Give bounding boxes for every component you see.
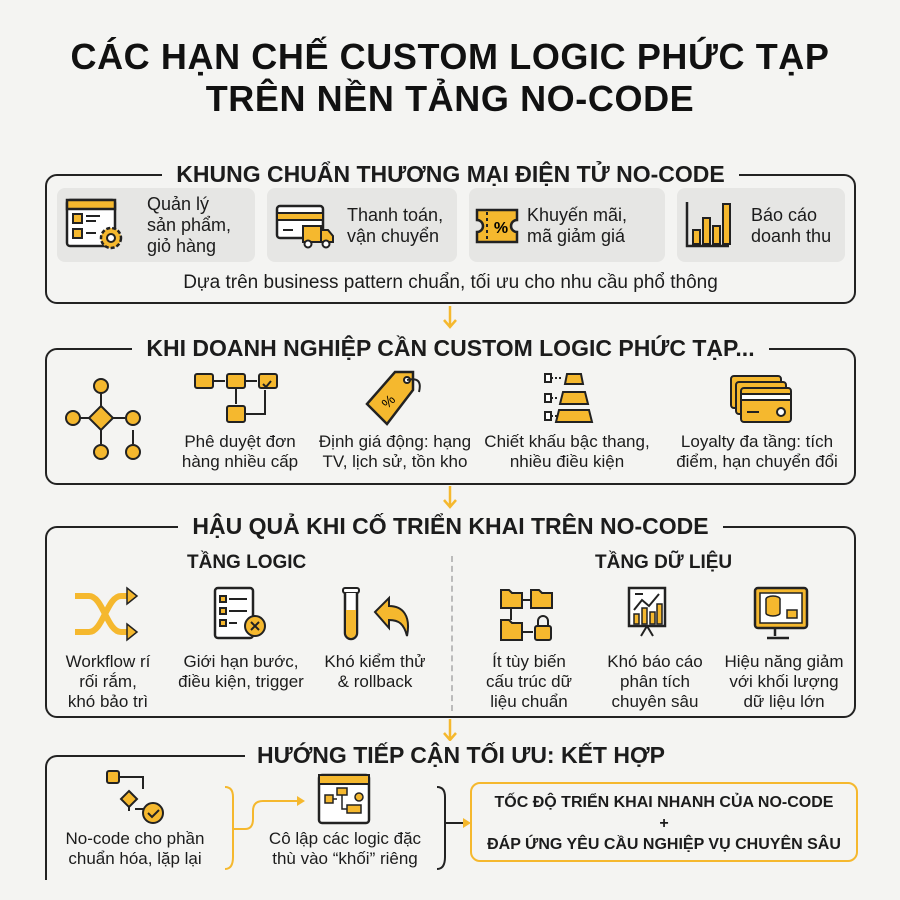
card: khuyến mãi (469, 188, 665, 262)
label: ít tùy biến: cấu trúc dữ (486, 672, 572, 691)
label: định giá: Định giá động: hạng (319, 432, 471, 451)
label: workflow (66, 652, 150, 711)
label: chiết khấu: nhiều điều kiện (510, 452, 624, 471)
label: no-code: chuẩn hóa, lặp lại (68, 849, 202, 868)
label: ít tùy biến (486, 652, 572, 711)
card: quản lý sản phẩm (57, 188, 255, 262)
footer text: Dựa trên business pattern chuẩn, tối ưu cho nhu cầu phổ thông (183, 272, 718, 293)
item: loyalty (676, 375, 838, 471)
label: giới hạn: Giới hạn bước, (184, 652, 298, 671)
text: quản lý: giỏ hàng (147, 236, 216, 256)
heading: khung chuẩn: KHUNG CHUẨN THƯƠNG MẠI ĐIỆN TỬ NO-CODE (176, 161, 725, 187)
result box: ĐÁP ỨNG YÊU CẦU NGHIỆP VỤ CHUYÊN SÂU (487, 836, 841, 853)
label: workflow: rối rắm, (79, 672, 137, 691)
label: loyalty: điểm, hạn chuyển đổi (676, 452, 838, 471)
label: hiệu năng: dữ liệu lớn (743, 692, 825, 711)
result box (470, 782, 858, 862)
label: hiệu năng: với khối lượng (729, 672, 839, 691)
item: định giá (319, 370, 471, 471)
title (70, 36, 830, 119)
icon: window blocks (317, 773, 377, 829)
icon: presentation chart (625, 586, 685, 644)
text: khuyến mãi (527, 205, 627, 246)
icon: stacked cards (730, 375, 792, 423)
panel: hướng tiếp cận (45, 755, 856, 880)
panel: custom logic (45, 348, 856, 485)
title: TRÊN NỀN TẢNG NO-CODE (206, 78, 694, 119)
item: kiểm thử (324, 587, 426, 691)
icon: monitor database (753, 586, 813, 644)
arrow 3 (441, 719, 459, 743)
icon: coupon (476, 208, 518, 244)
label: ít tùy biến: Ít tùy biến (492, 652, 566, 671)
result box: + (659, 815, 669, 832)
label: cô lập: Cô lập các logic đặc (269, 829, 421, 848)
label: no-code: No-code cho phần (66, 829, 204, 848)
label: cô lập (255, 829, 435, 869)
icon: price tag: % (378, 391, 398, 411)
icon: folders lock (500, 589, 553, 641)
icon: approval steps (194, 373, 278, 423)
label: chiết khấu: Chiết khấu bậc thang, (484, 432, 650, 451)
label: cô lập: thù vào “khối” riêng (272, 849, 418, 868)
icon: price tag (365, 370, 421, 426)
title: CÁC HẠN CHẾ CUSTOM LOGIC PHỨC TẠP (70, 36, 830, 77)
item: phê duyệt (182, 373, 298, 471)
label: phê duyệt (182, 432, 298, 471)
item: workflow (66, 586, 150, 711)
item: chiết khấu (484, 373, 650, 471)
icon: flow diagram (65, 378, 141, 460)
text: báo cáo: doanh thu (751, 226, 831, 246)
subheading: tầng logic: TẦNG LOGIC (187, 552, 306, 573)
text: khuyến mãi: mã giảm giá (527, 226, 625, 246)
icon: flow check (105, 769, 175, 829)
panel: khung chuẩn (45, 174, 856, 304)
label: hiệu năng (717, 652, 851, 712)
label: giới hạn (178, 652, 304, 691)
label: khó báo cáo (595, 652, 715, 712)
icon: test tube rollback (342, 587, 410, 640)
text: báo cáo: Báo cáo (751, 205, 817, 225)
text: quản lý: Quản lý (147, 194, 209, 214)
item: cô lập (255, 767, 435, 877)
label: hiệu năng: Hiệu năng giảm (724, 652, 844, 671)
card: báo cáo (677, 188, 845, 262)
label: loyalty (676, 432, 838, 471)
label: workflow: khó bảo trì (68, 692, 148, 711)
icon: bar chart (686, 202, 731, 248)
label: no-code (55, 829, 215, 869)
icon: product management (66, 198, 122, 250)
label: loyalty: Loyalty đa tầng: tích (681, 432, 833, 451)
item: giới hạn (178, 586, 304, 691)
arrow 1 (443, 306, 457, 329)
label: phê duyệt: Phê duyệt đơn (184, 432, 296, 451)
label: khó báo cáo: chuyên sâu (612, 692, 698, 711)
label: giới hạn: điều kiện, trigger (178, 672, 304, 691)
item: khó báo cáo (607, 586, 703, 711)
label: định giá (319, 432, 471, 471)
item: no-code (55, 767, 215, 877)
result box: TỐC ĐỘ TRIỂN KHAI NHANH CỦA NO-CODE (495, 794, 833, 811)
arrow 2 (443, 486, 457, 509)
label: ít tùy biến: liệu chuẩn (490, 692, 568, 711)
icon: checklist x (214, 586, 266, 640)
label: kiểm thử: & rollback (338, 672, 412, 691)
card: thanh toán (267, 188, 457, 262)
icon: card and truck (276, 204, 334, 248)
text: thanh toán: Thanh toán, (347, 205, 443, 225)
panel: hậu quả (45, 526, 856, 718)
heading: hậu quả: HẬU QUẢ KHI CỐ TRIỂN KHAI TRÊN NO-CODE (192, 513, 709, 539)
subheading: tầng dữ liệu: TẦNG DỮ LIỆU (595, 552, 732, 573)
text: quản lý: sản phẩm, (147, 215, 231, 235)
label: phê duyệt: hàng nhiều cấp (182, 452, 298, 471)
label: khó báo cáo: phân tích (620, 672, 690, 691)
label: khó báo cáo: Khó báo cáo (607, 652, 703, 671)
icon: pyramid tiers (544, 373, 594, 423)
text: quản lý (147, 194, 231, 256)
label: kiểm thử (324, 652, 426, 691)
text: thanh toán (347, 205, 443, 246)
item: ít tùy biến (486, 589, 572, 711)
label: workflow: Workflow rí (66, 652, 150, 671)
icon: shuffle arrows (75, 586, 138, 642)
heading: custom logic: KHI DOANH NGHIỆP CẦN CUSTOM LOGIC PHỨC TẠP... (146, 335, 755, 361)
item: hiệu năng (717, 584, 851, 714)
text: thanh toán: vận chuyển (347, 226, 439, 246)
text: báo cáo (751, 205, 831, 246)
heading: hướng tiếp cận: HƯỚNG TIẾP CẬN TỐI ƯU: KẾT HỢP (257, 742, 665, 768)
icon: coupon: % (494, 220, 508, 237)
bracket right (437, 783, 477, 883)
label: chiết khấu (484, 432, 650, 471)
bracket and arrow (225, 783, 325, 883)
label: định giá: TV, lịch sử, tồn kho (323, 452, 467, 471)
label: kiểm thử: Khó kiểm thử (324, 652, 426, 671)
text: khuyến mãi: Khuyến mãi, (527, 205, 627, 225)
